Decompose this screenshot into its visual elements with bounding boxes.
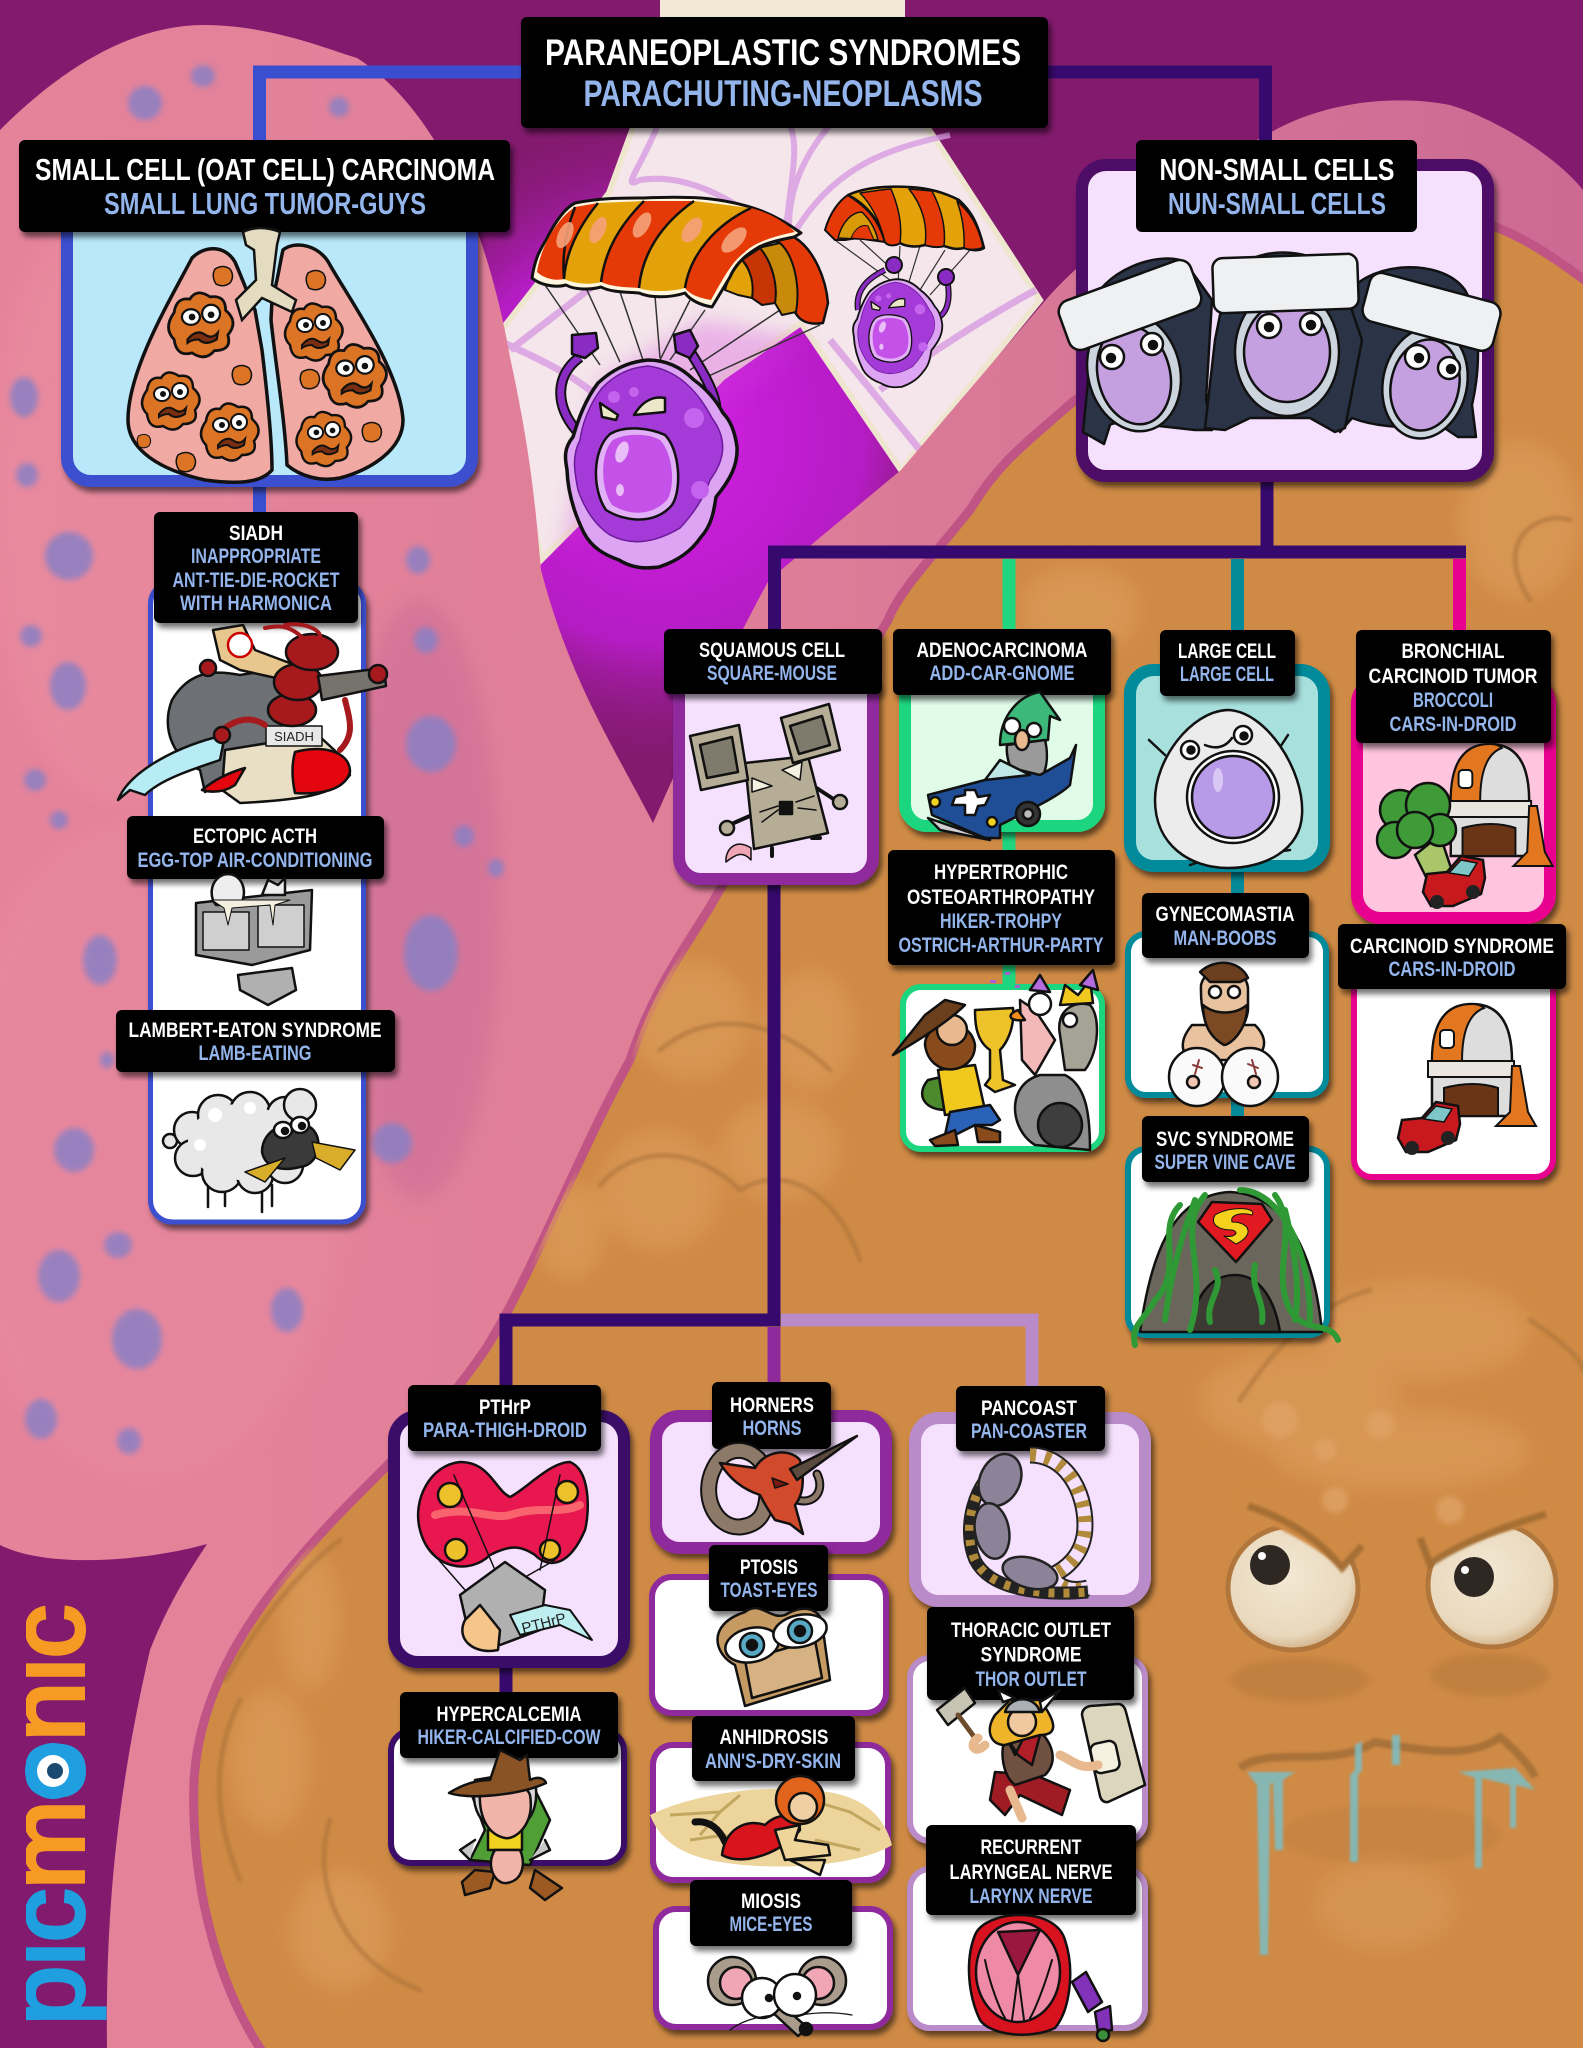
label: ectopic ACTH: ECTOPIC ACTH	[193, 825, 317, 848]
icon: parachuting thigh droid	[418, 1462, 592, 1651]
panel: carcinoid syndrome	[1338, 924, 1566, 1177]
panel: miosis	[656, 1880, 890, 2036]
label: adenocarcinoma: ADD-CAR-GNOME	[930, 662, 1074, 685]
title: PARANEOPLASTIC SYNDROMES	[545, 32, 1021, 73]
label: thoracic outlet: SYNDROME	[980, 1644, 1082, 1666]
panel: SVC syndrome	[1128, 1116, 1338, 1345]
connector lines	[260, 72, 1466, 1700]
background: angry tumor face	[1228, 1402, 1556, 1955]
label: SIADH: WITH HARMONICA	[180, 592, 332, 615]
icon: pan coaster	[969, 1447, 1088, 1595]
icon: big parachuting neoplasm	[532, 197, 828, 568]
label: ectopic ACTH: EGG-TOP AIR-CONDITIONING	[138, 849, 372, 872]
label: carcinoid syndrome: CARS-IN-DROID	[1388, 958, 1516, 981]
background: orange tumor mass	[194, 225, 1583, 2048]
label: SVC syndrome	[1142, 1116, 1309, 1182]
title: PARACHUTING-NEOPLASMS	[584, 73, 982, 114]
icon: larynx with robotic leg	[969, 1915, 1112, 2041]
label: recurrent laryngeal nerve: LARYNGEAL NERVE	[950, 1861, 1112, 1884]
label: SIADH: SIADH	[229, 522, 283, 545]
label: Lambert-Eaton: LAMBERT-EATON SYNDROME	[128, 1019, 382, 1042]
background: trachea and bronchi	[496, 0, 1040, 560]
label: large cell: LARGE CELL	[1178, 640, 1276, 663]
label: miosis: MICE-EYES	[730, 1913, 812, 1936]
label: horners	[712, 1382, 831, 1449]
label: ectopic ACTH	[127, 816, 384, 879]
icon: cars-in-droid	[1398, 1004, 1536, 1155]
label: anhidrosis: ANHIDROSIS	[720, 1726, 828, 1749]
label: bronchial carcinoid	[1356, 630, 1551, 743]
label: hypertrophic: OSTRICH-ARTHUR-PARTY	[898, 934, 1104, 957]
label: ptosis	[709, 1545, 828, 1611]
label: PTHrP	[408, 1385, 601, 1451]
label: PTHrP: PARA-THIGH-DROID	[423, 1419, 587, 1442]
panel: small cell carcinoma	[19, 140, 510, 482]
label: bronchial carcinoid: CARCINOID TUMOR	[1368, 665, 1538, 688]
underside arches	[775, 237, 828, 324]
icon: Ann on dry ground	[650, 1776, 892, 1875]
label: gynecomastia	[1142, 893, 1309, 958]
label: adenocarcinoma	[893, 629, 1111, 695]
panel: hypercalcemia	[391, 1692, 624, 1900]
panel: large cell	[1130, 630, 1324, 868]
heading: non-small cells: NUN-SMALL CELLS	[1168, 186, 1386, 221]
icon: large cell egg	[1149, 710, 1302, 868]
heading: small cell: SMALL LUNG TUMOR-GUYS	[104, 186, 426, 221]
label: SVC syndrome: SUPER VINE CAVE	[1154, 1151, 1296, 1174]
label: pancoast: PANCOAST	[981, 1397, 1077, 1420]
icon: three nuns	[1055, 252, 1503, 447]
label: hypertrophic: HYPERTROPHIC	[934, 861, 1068, 884]
icon: super vine cave	[1134, 1190, 1338, 1345]
label: PTHrP: PTHrP	[479, 1396, 531, 1419]
label: thoracic outlet: THORACIC OUTLET	[951, 1619, 1111, 1642]
icon: small parachuting neoplasm	[825, 187, 984, 387]
label: bronchial carcinoid: CARS-IN-DROID	[1390, 713, 1516, 736]
panel: ptosis	[652, 1545, 886, 1713]
icon: broccoli and cars-in-droid	[1377, 744, 1553, 909]
label: anhidrosis	[692, 1716, 855, 1781]
label: SVC syndrome: SVC SYNDROME	[1156, 1128, 1294, 1151]
label: miosis	[690, 1880, 852, 1946]
label: ptosis: PTOSIS	[740, 1556, 798, 1579]
label: horners: HORNERS	[730, 1394, 814, 1417]
heading: small cell	[19, 140, 510, 232]
label: recurrent laryngeal nerve: RECURRENT	[980, 1836, 1082, 1859]
icon: ant on rocket: SIADH	[274, 729, 314, 744]
icon: ant on rocket	[118, 624, 387, 803]
panel: PTHrP	[394, 1385, 624, 1662]
icon: mouse with small pupils	[708, 1957, 852, 2036]
panel: SIADH, ectopic ACTH, Lambert-Eaton column	[116, 512, 395, 1222]
icon: parachuting thigh droid: PTHrP	[520, 1610, 568, 1637]
label: thoracic outlet	[927, 1607, 1134, 1700]
panel: recurrent laryngeal nerve	[910, 1825, 1145, 2041]
icon: gnome in car	[928, 692, 1076, 840]
label: Lambert-Eaton	[116, 1010, 395, 1072]
panel: thoracic outlet	[910, 1607, 1145, 1841]
panel: gynecomastia	[1128, 893, 1326, 1106]
icon: sheep eating	[163, 1089, 355, 1212]
canopy front	[532, 197, 801, 307]
heading: non-small cells	[1136, 140, 1417, 232]
icon: toast with droopy eyes	[718, 1608, 830, 1706]
icon: square mouse	[690, 704, 847, 862]
label: recurrent laryngeal nerve: LARYNX NERVE	[970, 1885, 1092, 1908]
icon: hiker calcified cow	[449, 1750, 562, 1900]
label: hypercalcemia: HYPERCALCEMIA	[436, 1703, 582, 1726]
label: squamous cell: SQUARE-MOUSE	[707, 662, 837, 685]
label: hypertrophic: OSTEOARTHROPATHY	[907, 886, 1095, 909]
label: SIADH: INAPPROPRIATE	[191, 545, 321, 568]
label: Lambert-Eaton: LAMB-EATING	[198, 1042, 312, 1065]
label: hypercalcemia	[400, 1692, 618, 1758]
label: squamous cell	[664, 629, 882, 694]
panel: Pancoast	[915, 1386, 1145, 1601]
icon: egg-top air conditioner	[196, 874, 312, 1005]
label: gynecomastia: GYNECOMASTIA	[1156, 903, 1294, 926]
label: pancoast	[956, 1386, 1105, 1451]
panel: anhidrosis	[650, 1716, 892, 1880]
panel: non-small cells	[1055, 140, 1503, 476]
arms and fists	[561, 353, 716, 430]
label: horners: HORNS	[742, 1417, 802, 1440]
icon: hiker, trophy, ostrich and Arthur	[893, 970, 1098, 1150]
label: SIADH	[154, 512, 358, 623]
label: bronchial carcinoid: BRONCHIAL	[1402, 640, 1505, 663]
label: carcinoid syndrome	[1338, 924, 1566, 989]
heading: small cell: SMALL CELL (OAT CELL) CARCINOMA	[35, 152, 495, 187]
label: thoracic outlet: THOR OUTLET	[976, 1668, 1087, 1691]
label: hypertrophic: HIKER-TROHPY	[940, 910, 1062, 933]
heading: non-small cells: NON-SMALL CELLS	[1160, 152, 1394, 187]
label: gynecomastia: MAN-BOOBS	[1174, 927, 1276, 950]
label: hypercalcemia: HIKER-CALCIFIED-COW	[418, 1726, 601, 1749]
label: squamous cell: SQUAMOUS CELL	[699, 639, 845, 662]
panel: squamous cell	[664, 629, 882, 879]
label: miosis: MIOSIS	[741, 1890, 801, 1913]
panel: bronchial carcinoid tumor	[1356, 630, 1553, 918]
label: large cell: LARGE CELL	[1180, 663, 1274, 686]
panel: Horner's	[656, 1382, 886, 1548]
label: anhidrosis: ANN'S-DRY-SKIN	[705, 1750, 841, 1773]
panel: hypertrophic osteoarthropathy	[888, 850, 1115, 1150]
panel: adenocarcinoma	[893, 629, 1111, 840]
label: recurrent laryngeal nerve	[926, 1825, 1136, 1915]
icon: horned devil	[709, 1436, 857, 1534]
icon: man with breasts	[1169, 963, 1278, 1106]
label: pancoast: PAN-COASTER	[971, 1420, 1087, 1443]
icon: lungs with tumor guys	[128, 228, 403, 482]
label: bronchial carcinoid: BROCCOLI	[1413, 689, 1493, 712]
label: adenocarcinoma: ADENOCARCINOMA	[916, 639, 1088, 662]
title	[521, 17, 1048, 128]
label: ptosis: TOAST-EYES	[720, 1579, 818, 1602]
label: SIADH: ANT-TIE-DIE-ROCKET	[172, 569, 340, 592]
label: hypertrophic	[888, 850, 1115, 965]
icon: Thor and outlet	[937, 1688, 1145, 1818]
label: large cell	[1160, 630, 1295, 696]
